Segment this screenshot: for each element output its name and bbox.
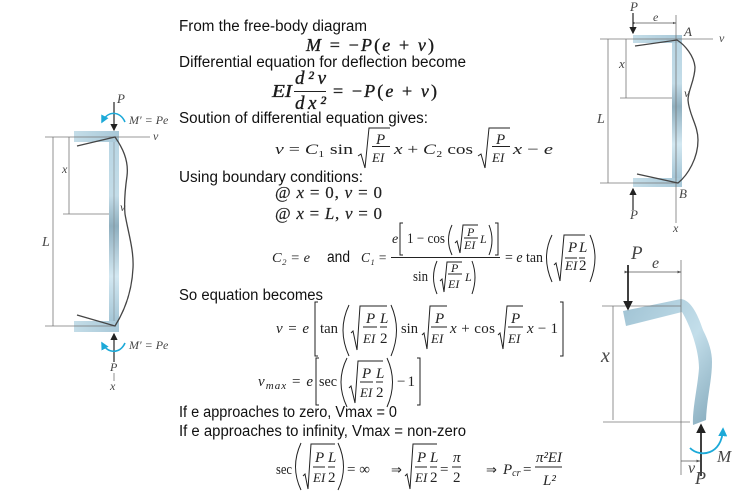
equation: maximum deflection: L: [375, 366, 384, 382]
equation: constants: L: [578, 240, 587, 256]
boundary condition 2: @ x = L, v = 0: [275, 204, 382, 223]
heading: solution: Soution of differential equation gives:: [179, 110, 428, 127]
equation: constants: and: [327, 249, 350, 266]
equation: deflection: L: [379, 311, 388, 327]
equation: general solution: P: [495, 132, 505, 148]
equation: maximum deflection: EI: [359, 385, 373, 400]
equation: maximum deflection: [258, 358, 420, 407]
bottom-right bent section diagram: P: [630, 243, 643, 264]
note: e approaches infinity: If e approaches to infinity, Vmax = non-zero: [179, 423, 466, 440]
equation: deflection: x − 1: [526, 321, 558, 337]
equation: maximum deflection: v: [258, 374, 286, 392]
left column diagram: v: [120, 200, 126, 214]
equation: general solution: x − e: [512, 142, 553, 158]
equation: critical load: cr: [512, 468, 521, 479]
derivation text: [179, 18, 595, 490]
equation: general solution: EI: [371, 150, 385, 165]
equation: constants: C₂ = e: [272, 251, 310, 266]
equation: critical load: 2: [328, 470, 336, 486]
equation: critical load: =: [523, 462, 531, 478]
equation: critical load: π²EI: [536, 450, 563, 466]
left column diagram: M′ = Pe: [128, 113, 169, 127]
equation: moment: M = −P(e + v): [305, 35, 434, 56]
equation: differential equation: [271, 68, 437, 114]
equation: critical load: 2: [453, 470, 460, 486]
left column diagram: P: [109, 360, 118, 374]
equation: critical load: L²: [542, 473, 556, 489]
top-right column diagram: B: [679, 186, 687, 201]
equation: differential equation: = −P(e + v): [333, 81, 437, 102]
equation: deflection: tan: [320, 321, 338, 337]
boundary condition 1: @ x = 0, v = 0: [275, 183, 382, 202]
equation: deflection: v = e: [276, 321, 309, 337]
equation: constants: P: [450, 261, 459, 275]
top-right column diagram: x: [618, 56, 625, 71]
equation: critical load: L: [327, 450, 336, 466]
equation: general solution: x + C₂ cos: [393, 142, 473, 158]
left column diagram: L: [41, 235, 50, 250]
heading: free-body diagram: From the free-body diagram: [179, 18, 367, 35]
equation: constants: = e tan: [505, 250, 543, 266]
top-right column diagram: x: [672, 221, 679, 235]
top-right column diagram: A: [683, 24, 692, 39]
equation: critical load: sec: [276, 462, 292, 478]
equation: critical load: [276, 443, 563, 490]
top-right column diagram: L: [596, 112, 605, 127]
equation: deflection: x + cos: [449, 321, 495, 337]
equation: critical load: 2: [430, 470, 438, 486]
equation: critical load: P: [503, 462, 512, 478]
equation: deflection: 2: [380, 331, 388, 347]
equation: differential equation: EI: [271, 81, 293, 101]
equation: critical load: π: [453, 450, 461, 466]
equation: maximum deflection: e: [306, 374, 313, 390]
equation: general solution: EI: [491, 150, 505, 165]
equation: deflection: EI: [362, 331, 376, 346]
equation: general solution: v = C₁ sin: [275, 142, 354, 158]
equation: constants: L: [479, 232, 487, 246]
heading: differential equation: Differential equation for deflection become: [179, 54, 466, 71]
left column diagram: v: [153, 129, 159, 143]
top-right column diagram: e: [653, 10, 659, 24]
equation: deflection: sin: [401, 321, 418, 337]
equation: constants: sin: [413, 269, 428, 285]
top-right column diagram: v: [719, 31, 725, 45]
equation: constants: C₁ =: [361, 251, 387, 266]
left column diagram: x: [109, 379, 116, 393]
bottom-right bent section diagram: P: [694, 468, 706, 488]
bottom-right bent section diagram: v: [688, 460, 696, 477]
heading: boundary conditions: Using boundary conditions:: [179, 169, 363, 186]
equation: general solution: [275, 128, 553, 168]
equation: maximum deflection: 2: [376, 385, 384, 401]
equation: maximum deflection: − 1: [397, 374, 415, 390]
equation: differential equation: d²v: [295, 68, 327, 89]
equation: critical load: EI: [312, 470, 326, 485]
left column diagram: x: [61, 162, 68, 176]
left column diagram: M′ = Pe: [128, 338, 169, 352]
equation: deflection: EI: [430, 331, 444, 346]
equation: general solution: P: [375, 132, 385, 148]
equation: critical load: P: [314, 450, 324, 466]
equation: constants: P: [567, 240, 577, 256]
equation: differential equation: dx²: [295, 93, 326, 114]
equation: maximum deflection: =: [287, 374, 305, 390]
equation: constants: 1 − cos: [407, 231, 445, 247]
top-right column diagram: v: [684, 86, 690, 100]
equation: deflection: EI: [507, 331, 521, 346]
equation: deflection: P: [434, 311, 444, 327]
top-right column diagram: P: [629, 207, 638, 222]
equation: constants: L: [464, 270, 472, 284]
heading: so equation becomes: So equation becomes: [179, 287, 323, 304]
note: e approaches zero: If e approaches to zero, Vmax = 0: [179, 404, 397, 421]
equation: constants: e: [392, 232, 398, 247]
left column diagram: P: [116, 91, 125, 106]
equation: critical load: EI: [414, 470, 428, 485]
equation: deflection: P: [510, 311, 520, 327]
left column diagram: [41, 91, 169, 393]
equation: constants: EI: [564, 258, 578, 273]
equation: maximum deflection: max: [266, 380, 286, 392]
equation: critical load: P: [416, 450, 426, 466]
equation: maximum deflection: P: [361, 366, 371, 382]
top-right column diagram: [596, 0, 725, 235]
bottom-right bent section diagram: [600, 243, 732, 488]
equation: constants: EI: [463, 238, 476, 252]
equation: constants: 2: [579, 258, 586, 274]
equation: critical load: =: [440, 462, 448, 478]
bottom-right bent section diagram: x: [600, 345, 610, 367]
equation: deflection: P: [365, 311, 375, 327]
equation: critical load: = ∞: [347, 462, 370, 478]
equation: maximum deflection: sec: [319, 374, 337, 390]
bottom-right bent section diagram: e: [652, 255, 659, 272]
equation: critical load: ⇒: [486, 462, 497, 477]
equation: deflection: [276, 302, 563, 356]
equation: constants: EI: [447, 277, 460, 291]
bottom-right bent section diagram: M: [716, 447, 732, 466]
equation: constants: [272, 223, 595, 294]
equation: critical load: L: [429, 450, 438, 466]
equation: constants: P: [466, 225, 475, 239]
equation: critical load: ⇒: [391, 462, 402, 477]
